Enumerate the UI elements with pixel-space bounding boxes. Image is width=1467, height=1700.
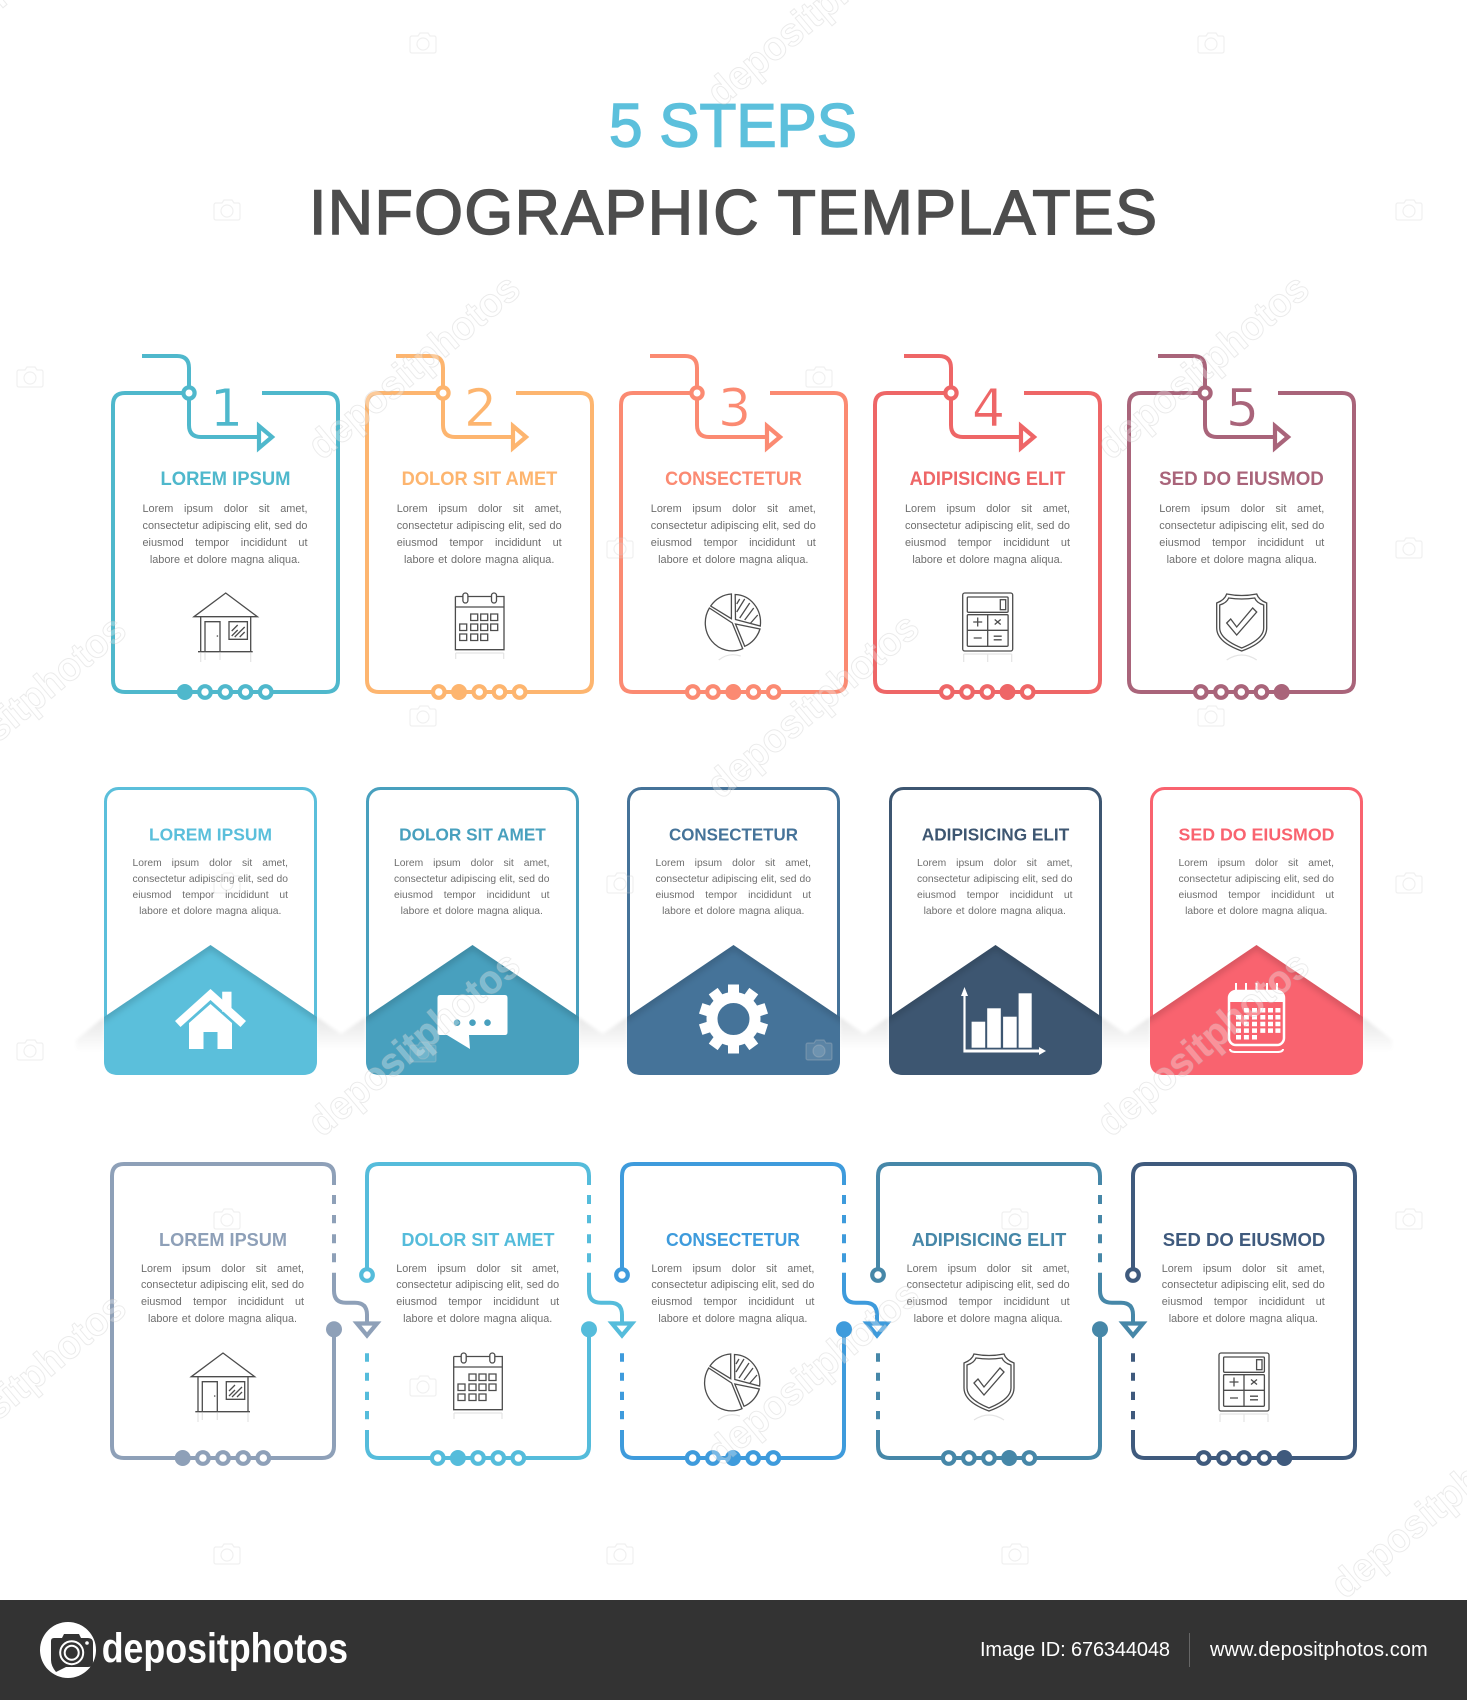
body text: Lorem ipsum dolor sit amet,	[907, 1262, 1070, 1274]
icon: calendar	[454, 1353, 502, 1419]
entry node	[872, 1269, 883, 1281]
connector arrow	[581, 1273, 632, 1337]
body text	[141, 1262, 304, 1325]
connector arrow	[836, 1273, 887, 1337]
frame	[875, 393, 1100, 692]
progress dots	[1195, 684, 1290, 700]
watermark overlay: depositphotos	[699, 605, 927, 807]
body text: consectetur adipiscing elit, sed do	[394, 874, 550, 885]
icon: house	[191, 1353, 255, 1422]
body text: labore et dolore magna aliqua.	[914, 1313, 1063, 1325]
body text: consectetur adipiscing elit, sed do	[397, 520, 562, 532]
watermark overlay: depositphotos	[1089, 943, 1317, 1145]
coloured base	[1144, 945, 1369, 1075]
number: 1	[209, 379, 243, 439]
body text: consectetur adipiscing elit, sed do	[905, 520, 1070, 532]
panel: row 2 step 4	[889, 787, 1102, 1075]
coloured base	[360, 945, 584, 1075]
body text: labore et dolore magna aliqua.	[924, 906, 1066, 917]
body text: eiusmod tempor incididunt ut	[1178, 890, 1334, 901]
panel: row 2 step 2	[366, 787, 579, 1075]
panel: row 1 step 1	[111, 354, 340, 700]
title	[309, 92, 1157, 248]
heading: LOREM IPSUM	[149, 825, 272, 845]
heading: SED DO EIUSMOD	[1163, 1229, 1325, 1250]
frame	[1129, 393, 1354, 692]
card outline	[890, 788, 1100, 1074]
body text: eiusmod tempor incididunt ut	[651, 1296, 814, 1308]
title line: 5 steps: 5 STEPS	[609, 92, 857, 161]
body text: consectetur adipiscing elit, sed do	[917, 874, 1072, 885]
card outline	[367, 788, 577, 1074]
body text: Lorem ipsum dolor sit amet,	[397, 503, 562, 515]
panel: row 3 step 4	[870, 1162, 1148, 1466]
card 1 graphic	[104, 787, 317, 1075]
body text: Lorem ipsum dolor sit amet,	[132, 858, 288, 869]
body text: eiusmod tempor incididunt ut	[132, 890, 288, 901]
panel: row 1 step 2	[365, 354, 594, 700]
body text: labore et dolore magna aliqua.	[912, 554, 1063, 566]
body text: consectetur adipiscing elit, sed do	[907, 1279, 1070, 1291]
body text	[656, 858, 811, 917]
body text: labore et dolore magna aliqua.	[662, 906, 804, 917]
body text: Lorem ipsum dolor sit amet,	[1178, 858, 1334, 869]
watermark overlay: depositphotos	[300, 943, 528, 1145]
body text	[1162, 1262, 1325, 1325]
progress dots	[687, 684, 779, 700]
progress dots	[176, 684, 271, 700]
frame	[878, 1164, 1100, 1458]
connector arrow	[326, 1273, 377, 1337]
body text: labore et dolore magna aliqua.	[139, 906, 281, 917]
divider	[1188, 1633, 1190, 1667]
body text: consectetur adipiscing elit, sed do	[656, 874, 811, 885]
panel: row 2 step 5	[1150, 787, 1363, 1075]
card outline	[106, 788, 316, 1074]
body text: Lorem ipsum dolor sit amet,	[142, 503, 308, 515]
body text: labore et dolore magna aliqua.	[1167, 554, 1317, 566]
body text: eiusmod tempor incididunt ut	[1159, 537, 1324, 549]
panel: row 2 step 1	[104, 787, 317, 1075]
progress dots	[941, 684, 1034, 700]
arrow	[650, 356, 780, 448]
body text: labore et dolore magna aliqua.	[401, 906, 543, 917]
body text	[132, 858, 288, 917]
step 3 line graphic	[619, 354, 848, 700]
progress dots	[432, 1450, 524, 1466]
body text: labore et dolore magna aliqua.	[404, 554, 554, 566]
watermark overlay: depositphotos	[1089, 266, 1317, 468]
card outline	[1152, 788, 1362, 1074]
number: 2	[464, 379, 497, 439]
body text	[1178, 858, 1334, 917]
arrow	[142, 356, 272, 448]
body text: eiusmod tempor incididunt ut	[907, 1296, 1070, 1308]
body text: Lorem ipsum dolor sit amet,	[905, 503, 1070, 515]
icon: shield	[1217, 594, 1267, 660]
frame	[1133, 1164, 1355, 1458]
body text: consectetur adipiscing elit, sed do	[651, 1279, 814, 1291]
body text: consectetur adipiscing elit, sed do	[396, 1279, 559, 1291]
step 1 line graphic	[110, 1162, 382, 1466]
icon: house	[175, 989, 246, 1049]
progress dots	[942, 1450, 1035, 1466]
step 3 line graphic	[614, 1162, 892, 1466]
frame	[621, 393, 846, 692]
body text: consectetur adipiscing elit, sed do	[132, 874, 288, 885]
body text	[1159, 503, 1324, 566]
icon: speech bubble	[437, 995, 507, 1049]
body text: eiusmod tempor incididunt ut	[905, 537, 1070, 549]
heading: DOLOR SIT AMET	[401, 468, 557, 490]
body text: Lorem ipsum dolor sit amet,	[394, 858, 550, 869]
number: 3	[718, 379, 751, 439]
heading: SED DO EIUSMOD	[1178, 825, 1334, 845]
entry node	[361, 1269, 373, 1281]
icon: pie chart	[705, 594, 760, 660]
body text: consectetur adipiscing elit, sed do	[1178, 874, 1334, 885]
body text	[907, 1262, 1070, 1325]
title line: infographic templates: INFOGRAPHIC TEMPLATES	[309, 178, 1157, 248]
body text: labore et dolore magna aliqua.	[148, 1313, 297, 1325]
frame	[112, 393, 338, 692]
body text: Lorem ipsum dolor sit amet,	[1162, 1262, 1325, 1274]
body text: Lorem ipsum dolor sit amet,	[396, 1262, 559, 1274]
icon: calendar	[455, 593, 504, 659]
panel: row 3 step 3	[614, 1162, 892, 1466]
entry node	[617, 1269, 628, 1281]
panel: row 1 step 5	[1127, 354, 1356, 700]
step 2 line graphic	[359, 1162, 636, 1466]
watermark overlay: depositphotos	[699, 1272, 927, 1474]
card 4 graphic	[889, 787, 1102, 1075]
body text: Lorem ipsum dolor sit amet,	[917, 858, 1072, 869]
body text: eiusmod tempor incididunt ut	[1162, 1296, 1325, 1308]
step 5 line graphic	[1127, 354, 1356, 700]
heading: LOREM IPSUM	[159, 1229, 287, 1250]
body text: labore et dolore magna aliqua.	[150, 554, 300, 566]
website url: www.depositphotos.com	[1209, 1639, 1428, 1661]
card 2 graphic	[366, 787, 579, 1075]
body text: eiusmod tempor incididunt ut	[917, 890, 1072, 901]
body text: labore et dolore magna aliqua.	[1169, 1313, 1318, 1325]
body text: Lorem ipsum dolor sit amet,	[651, 1262, 814, 1274]
icon: calculator	[1219, 1353, 1269, 1422]
progress dots	[433, 684, 525, 700]
card 3 graphic	[627, 787, 840, 1075]
body text	[651, 1262, 814, 1325]
heading: ADIPISICING ELIT	[910, 468, 1065, 490]
coloured base	[98, 945, 323, 1075]
heading: CONSECTETUR	[665, 468, 802, 490]
heading: CONSECTETUR	[669, 825, 798, 845]
frame	[622, 1164, 844, 1458]
step 1 line graphic	[111, 354, 340, 700]
step 4 line graphic	[873, 354, 1102, 700]
body text: labore et dolore magna aliqua.	[403, 1313, 552, 1325]
coloured base	[621, 945, 846, 1075]
body text: Lorem ipsum dolor sit amet,	[651, 503, 816, 515]
coloured base	[882, 945, 1108, 1075]
body text	[396, 1262, 560, 1325]
heading: DOLOR SIT AMET	[402, 1229, 555, 1250]
body text	[397, 503, 562, 566]
progress dots	[1198, 1450, 1292, 1466]
icon: bar chart	[960, 987, 1046, 1055]
icon: wall calendar	[1229, 983, 1284, 1052]
arrow	[904, 356, 1034, 448]
icon: shield	[964, 1354, 1014, 1420]
number: 5	[1226, 379, 1259, 439]
image id: Image ID: 676344048	[980, 1639, 1170, 1661]
body text: consectetur adipiscing elit, sed do	[1159, 520, 1324, 532]
body text	[905, 503, 1070, 566]
heading: LOREM IPSUM	[160, 468, 290, 490]
body text	[394, 858, 550, 917]
panel: row 1 step 3	[619, 354, 848, 700]
heading: ADIPISICING ELIT	[911, 1229, 1067, 1250]
body text: Lorem ipsum dolor sit amet,	[1159, 503, 1324, 515]
body text: consectetur adipiscing elit, sed do	[1162, 1279, 1325, 1291]
step 5 line graphic	[1125, 1162, 1357, 1466]
progress dots	[687, 1450, 779, 1466]
card 5 graphic	[1150, 787, 1363, 1075]
body text: eiusmod tempor incididunt ut	[397, 537, 562, 549]
frame	[112, 1164, 334, 1458]
icon: calculator	[963, 593, 1013, 662]
panel: row 3 step 1	[110, 1162, 382, 1466]
body text: labore et dolore magna aliqua.	[1185, 906, 1327, 917]
card outline	[628, 788, 838, 1074]
body text: consectetur adipiscing elit, sed do	[651, 520, 816, 532]
progress dots	[175, 1450, 269, 1466]
panel: row 1 step 4	[873, 354, 1102, 700]
frame	[367, 1164, 589, 1458]
panel: row 2 step 3	[627, 787, 840, 1075]
body text: consectetur adipiscing elit, sed do	[142, 520, 308, 532]
heading: CONSECTETUR	[666, 1229, 801, 1250]
logo icon: camera	[40, 1622, 96, 1678]
entry node	[1127, 1269, 1139, 1281]
body text	[917, 858, 1072, 917]
body text: Lorem ipsum dolor sit amet,	[141, 1262, 304, 1274]
body text: eiusmod tempor incididunt ut	[656, 890, 811, 901]
body text: eiusmod tempor incididunt ut	[141, 1296, 304, 1308]
frame	[367, 393, 592, 692]
body text: Lorem ipsum dolor sit amet,	[656, 858, 811, 869]
body text: labore et dolore magna aliqua.	[658, 1313, 807, 1325]
body text: eiusmod tempor incididunt ut	[142, 537, 308, 549]
arrow	[1158, 356, 1288, 448]
step 2 line graphic	[365, 354, 594, 700]
logo wordmark: depositphotos	[102, 1625, 348, 1672]
icon: house	[194, 593, 257, 662]
body text: eiusmod tempor incididunt ut	[396, 1296, 559, 1308]
body text: eiusmod tempor incididunt ut	[394, 890, 550, 901]
footer band	[0, 1600, 1467, 1700]
panel: row 3 step 2	[359, 1162, 636, 1466]
number: 4	[972, 379, 1005, 439]
footer graphic	[40, 1622, 1428, 1678]
watermark overlay: depositphotos	[300, 266, 528, 468]
icon: pie chart	[705, 1354, 760, 1420]
body text	[142, 503, 308, 566]
icon: gear	[699, 984, 768, 1054]
connector arrow	[1092, 1273, 1143, 1337]
body text: labore et dolore magna aliqua.	[658, 554, 808, 566]
panel: row 3 step 5	[1125, 1162, 1357, 1466]
body text: consectetur adipiscing elit, sed do	[141, 1279, 304, 1291]
body text	[651, 503, 816, 566]
step 4 line graphic	[870, 1162, 1148, 1466]
heading: SED DO EIUSMOD	[1159, 468, 1324, 490]
heading: DOLOR SIT AMET	[399, 825, 546, 845]
body text: eiusmod tempor incididunt ut	[651, 537, 816, 549]
arrow	[396, 356, 526, 448]
heading: ADIPISICING ELIT	[921, 825, 1069, 845]
